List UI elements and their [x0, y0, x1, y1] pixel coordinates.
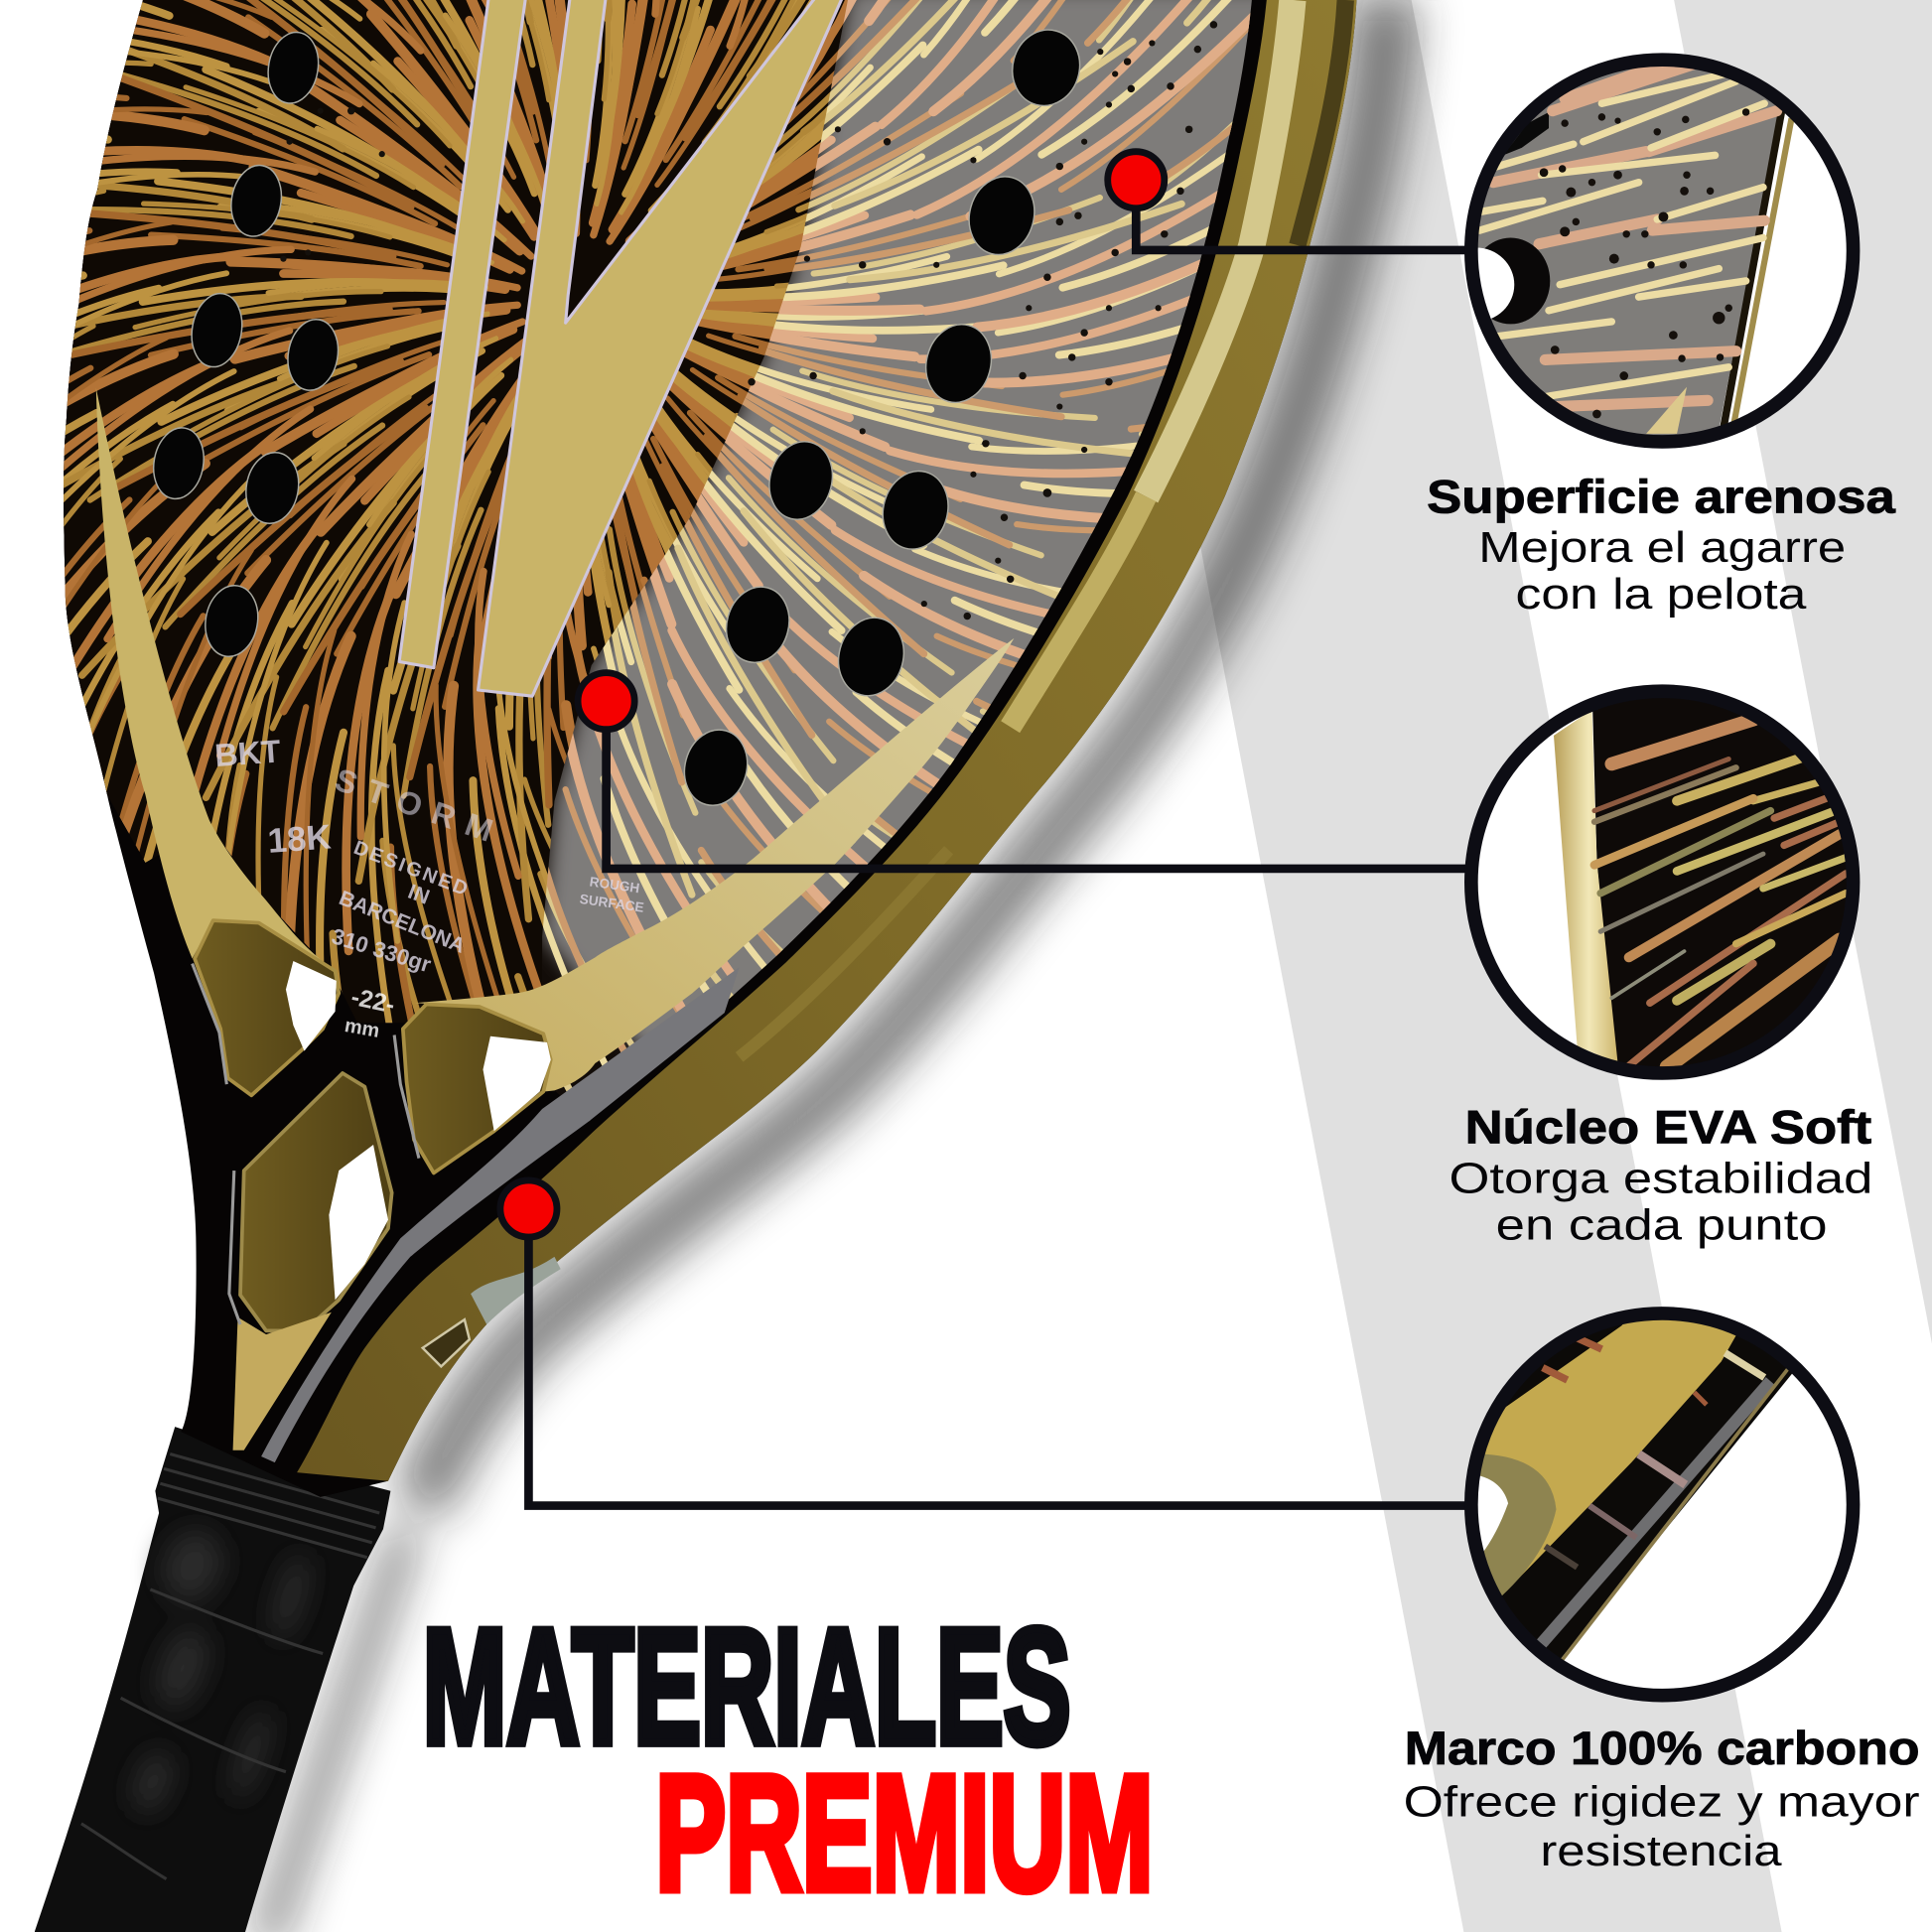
grey frame stripe — [261, 967, 740, 1462]
connector: superficie arenosa — [1136, 207, 1468, 250]
caption: superficie arenosa: con la pelota — [1516, 571, 1807, 619]
racket — [35, 0, 1356, 1932]
swirl streaks — [64, 0, 1251, 1122]
left gold swoosh — [96, 388, 336, 971]
caption: marco carbono: Ofrece rigidez y mayor — [1404, 1778, 1920, 1826]
marker dot 3 — [500, 1180, 557, 1237]
printed racket text: BARCELONA — [336, 887, 469, 958]
frame logo — [423, 1257, 561, 1366]
caption: marco carbono — [1404, 1722, 1920, 1875]
racket face holes — [148, 22, 1088, 812]
printed racket text: ROUGH — [589, 874, 640, 896]
printed racket text: mm — [343, 1015, 381, 1042]
right gold swoosh — [415, 638, 1014, 1092]
frame highlights — [740, 0, 1345, 1057]
printed racket text: 18K — [266, 818, 333, 861]
racket body silhouette — [64, 0, 1356, 1497]
title — [423, 1594, 1154, 1924]
caption: superficie arenosa: Mejora el agarre — [1478, 524, 1846, 572]
caption: nucleo EVA soft — [1449, 1101, 1872, 1250]
caption: marco carbono: Marco 100% carbono — [1405, 1722, 1920, 1774]
connector: nucleo EVA — [607, 727, 1468, 869]
caption: nucleo EVA soft: Núcleo EVA Soft — [1465, 1101, 1872, 1154]
printed racket text: IN — [405, 881, 433, 909]
caption: superficie arenosa — [1427, 470, 1896, 619]
marker dot 2 — [578, 673, 634, 730]
grey sandy area — [542, 0, 1282, 1109]
printed racket text — [213, 733, 645, 1042]
printed racket text: SURFACE — [579, 892, 645, 915]
sand specks — [280, 21, 1217, 620]
caption: marco carbono: resistencia — [1540, 1828, 1783, 1875]
V logo — [399, 0, 844, 696]
gold frame — [297, 0, 1356, 1481]
title: MATERIALES — [423, 1594, 1070, 1777]
printed racket text: DESIGNED — [350, 837, 473, 901]
printed racket text: STORM — [331, 761, 509, 853]
racket face — [64, 0, 1252, 1122]
printed racket text: BKT — [213, 733, 282, 773]
marker dot 1 — [1108, 152, 1165, 208]
detail circle: nucleo EVA — [1471, 684, 1872, 1090]
connector: marco carbono — [528, 1238, 1468, 1506]
detail circle: superficie arenosa — [1438, 50, 1854, 469]
detail circle: marco carbono — [1453, 1294, 1854, 1696]
handle grip — [35, 1427, 390, 1932]
printed racket text: -22- — [348, 984, 397, 1020]
caption: superficie arenosa: Superficie arenosa — [1427, 470, 1896, 522]
racket shadow — [265, 0, 1387, 1932]
caption: nucleo EVA soft: Otorga estabilidad — [1449, 1155, 1872, 1202]
throat openings — [193, 920, 551, 1450]
caption: nucleo EVA soft: en cada punto — [1496, 1202, 1828, 1250]
title: PREMIUM — [655, 1741, 1154, 1924]
printed racket text: 310 330gr — [329, 923, 434, 977]
